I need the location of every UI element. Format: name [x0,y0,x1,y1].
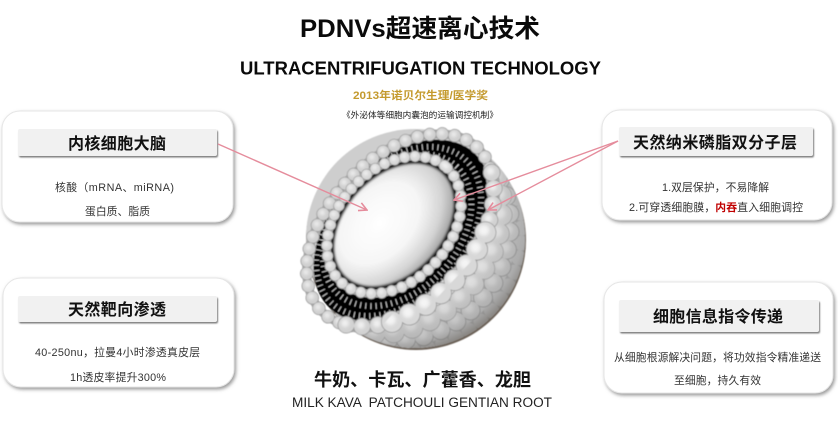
text: core contents: 核酸（mRNA、miRNA) [55,180,174,194]
heading: phospholipid bilayer [619,127,813,156]
panel: targeted penetration [3,278,234,387]
text: signal delivery description: 至细胞，持久有效 [674,373,761,387]
text: core contents [55,180,174,218]
award description: 《外泌体等细胞内囊泡的运输调控机制》 [342,109,498,120]
panel: phospholipid bilayer [602,110,832,220]
title: PDNVs超速离心技术 [300,15,540,43]
subtitle: ULTRACENTRIFUGATION TECHNOLOGY [240,58,601,78]
panel: core brain [2,111,233,222]
black lipid tails [279,105,526,356]
heading: cell signal delivery [619,300,819,332]
arrow: bilayer to inner layer [454,141,618,200]
text: bilayer benefits: 2.可穿透细胞膜，内吞直入细胞调控 [629,200,803,214]
arrow: core to sphere [218,144,367,210]
text: penetration data [35,345,200,384]
inner bead ring [300,130,488,320]
heading: targeted penetration: 天然靶向渗透 [68,300,166,319]
outer rim beads [270,98,530,362]
text: signal delivery description: 从细胞根源解决问题，将功效指令精准递送 [614,350,821,364]
text: penetration data: 40-250nu，拉曼4小时渗透真皮层 [35,345,200,359]
text: core contents: 蛋白质、脂质 [85,204,150,218]
ingredients English: MILK KAVA PATCHOULI GENTIAN ROOT [292,395,552,410]
award line: 2013年诺贝尔生理/医学奖 [353,88,488,102]
heading: targeted penetration [18,296,217,322]
heading: core brain [18,129,217,156]
heading: cell signal delivery: 细胞信息指令传递 [653,307,783,326]
text: bilayer benefits [629,180,803,214]
text: penetration data: 1h透皮率提升300% [70,370,166,384]
inner white core [310,140,478,310]
heading: phospholipid bilayer: 天然纳米磷脂双分子层 [633,133,797,152]
heading: core brain: 内核细胞大脑 [68,134,166,153]
arrow: bilayer to outer layer [488,141,618,210]
illustration: nanovesicle cross section [299,126,527,351]
text: signal delivery description [614,350,821,387]
ingredients heading: 牛奶、卡瓦、广藿香、龙胆 [314,370,531,390]
panel: cell signal delivery [604,282,833,393]
text: bilayer benefits: 1.双层保护，不易降解 [662,180,769,194]
